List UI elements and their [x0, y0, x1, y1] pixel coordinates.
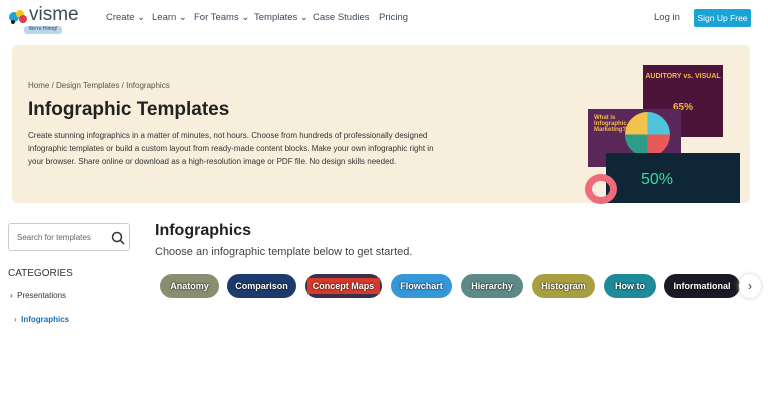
header: Templates ⌄ — [254, 12, 308, 23]
category pills: Informational — [673, 281, 730, 291]
logo — [9, 4, 79, 34]
navigation: Create ⌄ — [106, 12, 145, 23]
categories: › Infographics — [14, 315, 69, 324]
sign up button: Sign Up Free — [697, 13, 748, 23]
hero illustration: Infographic — [594, 121, 627, 127]
hero banner — [12, 45, 750, 203]
category pills — [160, 272, 763, 300]
category pills: How to — [615, 281, 645, 291]
header: Case Studies — [313, 12, 370, 23]
search box — [8, 223, 130, 251]
hero illustration: What is — [594, 115, 615, 121]
header — [9, 4, 751, 34]
hero illustration: Marketing? — [594, 127, 626, 133]
logo: visme — [29, 4, 79, 25]
sign up button — [694, 9, 751, 27]
category pills: Concept Maps — [313, 281, 374, 291]
header: For Teams ⌄ — [194, 12, 249, 23]
category pills: Anatomy — [170, 281, 209, 291]
category pills: Histogram — [541, 281, 586, 291]
title: Infographic Templates — [28, 99, 229, 120]
hero illustration: 50% — [641, 171, 673, 188]
section heading: Infographics — [155, 222, 251, 239]
category pills: Flowchart — [400, 281, 443, 291]
categories — [8, 268, 73, 324]
text: Choose an infographic template below to get started. — [155, 246, 412, 258]
category pills: Hierarchy — [471, 281, 513, 291]
search box: Search for templates — [17, 233, 91, 242]
categories: › Presentations — [10, 291, 66, 300]
hero illustration: 65% — [673, 102, 693, 113]
category pills: Comparison — [235, 281, 288, 291]
category pills: › — [748, 279, 752, 293]
description: Create stunning infographics in a matter of minutes, not hours. Choose from hundreds of professionally designed infographic templates or build a custom layout from ready-made content blocks. Make your own infographic right in your browser. Share online or download as a high-resolution image or PDF file. No design skills needed. — [28, 131, 434, 166]
hero illustration — [585, 65, 740, 204]
categories: CATEGORIES — [8, 268, 73, 279]
breadcrumb: Home / Design Templates / Infographics — [28, 81, 170, 90]
header: Log in — [654, 12, 680, 23]
header: Learn ⌄ — [152, 12, 187, 23]
hero illustration: AUDITORY vs. VISUAL — [645, 73, 721, 80]
logo: We're Hiring! — [29, 26, 57, 32]
header: Pricing — [379, 12, 408, 23]
